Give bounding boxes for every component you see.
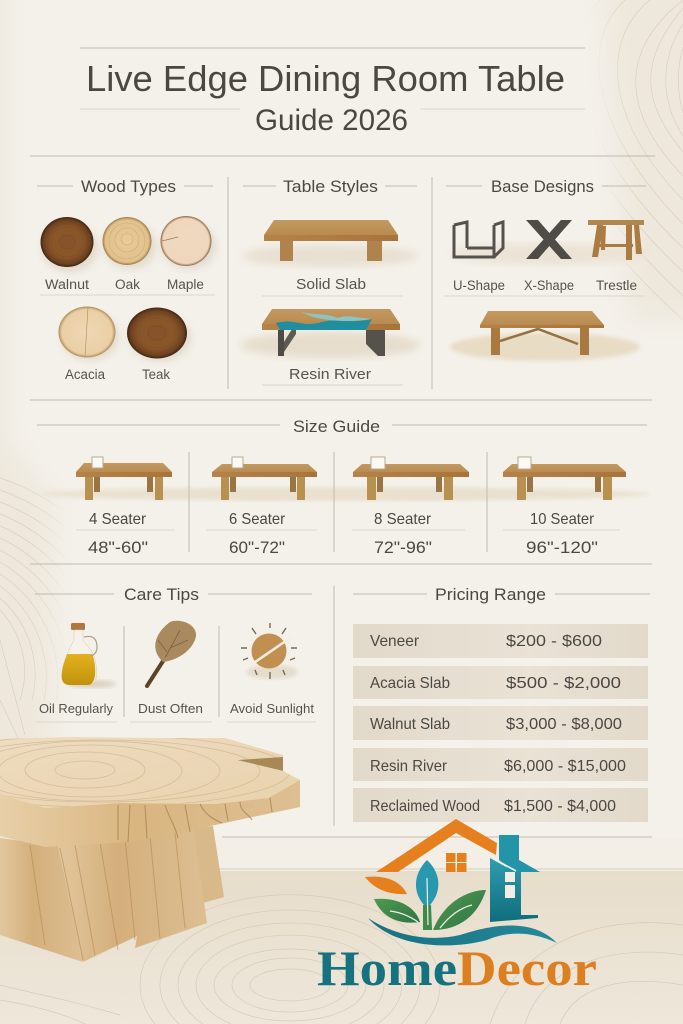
heading: care tips: Care Tips — [124, 585, 199, 604]
row: walnut slab — [353, 706, 648, 740]
labels: wood types: Teak — [142, 367, 170, 382]
label: solid slab: Solid Slab — [296, 277, 366, 293]
row: resin river: $6,000 - $15,000 — [504, 758, 626, 775]
baseboard — [215, 837, 683, 871]
labels: base designs: U-Shape — [453, 278, 505, 293]
icon: leaf duster — [147, 621, 196, 686]
labels: base designs: Trestle — [596, 278, 637, 293]
title: Live Edge Dining Room Table — [86, 58, 565, 99]
labels: wood types: Oak — [115, 277, 140, 292]
logo: HomeDecor — [317, 819, 597, 996]
panel: base designs — [444, 177, 650, 361]
heading: pricing range: Pricing Range — [435, 585, 546, 604]
row: walnut slab: $3,000 - $8,000 — [506, 716, 622, 733]
size labels — [76, 511, 620, 557]
size labels: 10 Seater — [530, 511, 595, 528]
row: resin river — [353, 748, 648, 781]
row: veneer — [353, 624, 648, 658]
wood slice: walnut — [40, 217, 98, 272]
table: solid slab — [242, 220, 418, 267]
rear leg — [193, 826, 224, 903]
wood slice: acacia — [58, 306, 119, 360]
live edge table photo — [0, 735, 300, 962]
icon: trestle base — [588, 220, 644, 260]
table: 4 seater — [76, 457, 172, 500]
labels: care tips: Dust Often — [138, 701, 203, 716]
labels: base designs — [453, 278, 637, 293]
table: 8 seater — [353, 457, 469, 500]
logo roof — [376, 819, 497, 872]
row: veneer: Veneer — [370, 633, 420, 650]
heading: wood types: Wood Types — [81, 177, 176, 196]
row: resin river: Resin River — [370, 758, 448, 775]
row: walnut slab: Walnut Slab — [370, 716, 450, 733]
front leg — [58, 828, 207, 962]
labels: wood types — [45, 277, 204, 382]
subtitle: Guide 2026 — [255, 104, 408, 137]
panel: table styles — [240, 177, 420, 385]
icon: oil bottle — [62, 623, 116, 688]
row: reclaimed wood — [353, 788, 648, 822]
panel: care tips — [35, 585, 316, 722]
size labels: 96"-120" — [526, 538, 598, 557]
slab front edge — [0, 780, 300, 847]
row: acacia slab: Acacia Slab — [370, 675, 450, 692]
wood slice: maple — [160, 216, 216, 269]
wood slice: oak — [102, 217, 156, 269]
row: acacia slab — [353, 666, 648, 699]
row: veneer: $200 - $600 — [506, 633, 602, 650]
labels: base designs: X-Shape — [524, 278, 574, 293]
slab top — [0, 737, 300, 808]
wood slice: teak — [127, 308, 191, 361]
notch — [237, 755, 283, 771]
icon: u-shape base — [454, 222, 503, 257]
logo leaves — [365, 860, 486, 930]
panel: wood types — [37, 177, 216, 382]
logo window — [446, 853, 466, 872]
left leg — [0, 838, 83, 962]
table: 6 seater — [212, 457, 317, 500]
labels: care tips: Avoid Sunlight — [230, 701, 314, 716]
size labels: 4 Seater — [89, 511, 147, 528]
table: 10 seater — [503, 457, 626, 500]
size labels: 8 Seater — [374, 511, 432, 528]
labels: care tips — [36, 701, 316, 722]
panel: size guide — [37, 417, 650, 557]
floor — [0, 871, 683, 1024]
row: reclaimed wood: $1,500 - $4,000 — [504, 798, 616, 815]
row: acacia slab: $500 - $2,000 — [506, 675, 621, 692]
icon: x-shape base — [526, 220, 572, 259]
heading: base designs: Base Designs — [491, 177, 594, 196]
labels: wood types: Maple — [167, 277, 204, 292]
row: reclaimed wood: Reclaimed Wood — [370, 798, 480, 815]
logo wave — [368, 918, 557, 945]
heading: size guide: Size Guide — [293, 417, 380, 436]
labels: wood types: Walnut — [45, 277, 89, 292]
size labels: 72"-96" — [374, 538, 432, 557]
labels: care tips: Oil Regularly — [39, 701, 113, 716]
heading: table styles: Table Styles — [283, 177, 378, 196]
logo wordmark: HomeDecor — [317, 940, 597, 996]
size labels: 60"-72" — [229, 538, 285, 557]
label: resin river: Resin River — [289, 367, 371, 383]
logo house tower — [489, 835, 540, 922]
size labels: 48"-60" — [88, 538, 148, 557]
table: trestle — [450, 311, 640, 361]
icon: sun — [241, 623, 298, 679]
table: resin river — [240, 309, 420, 358]
size labels: 6 Seater — [229, 511, 286, 528]
title block — [30, 48, 655, 156]
labels: wood types: Acacia — [65, 367, 105, 382]
panel: pricing range — [353, 585, 650, 822]
